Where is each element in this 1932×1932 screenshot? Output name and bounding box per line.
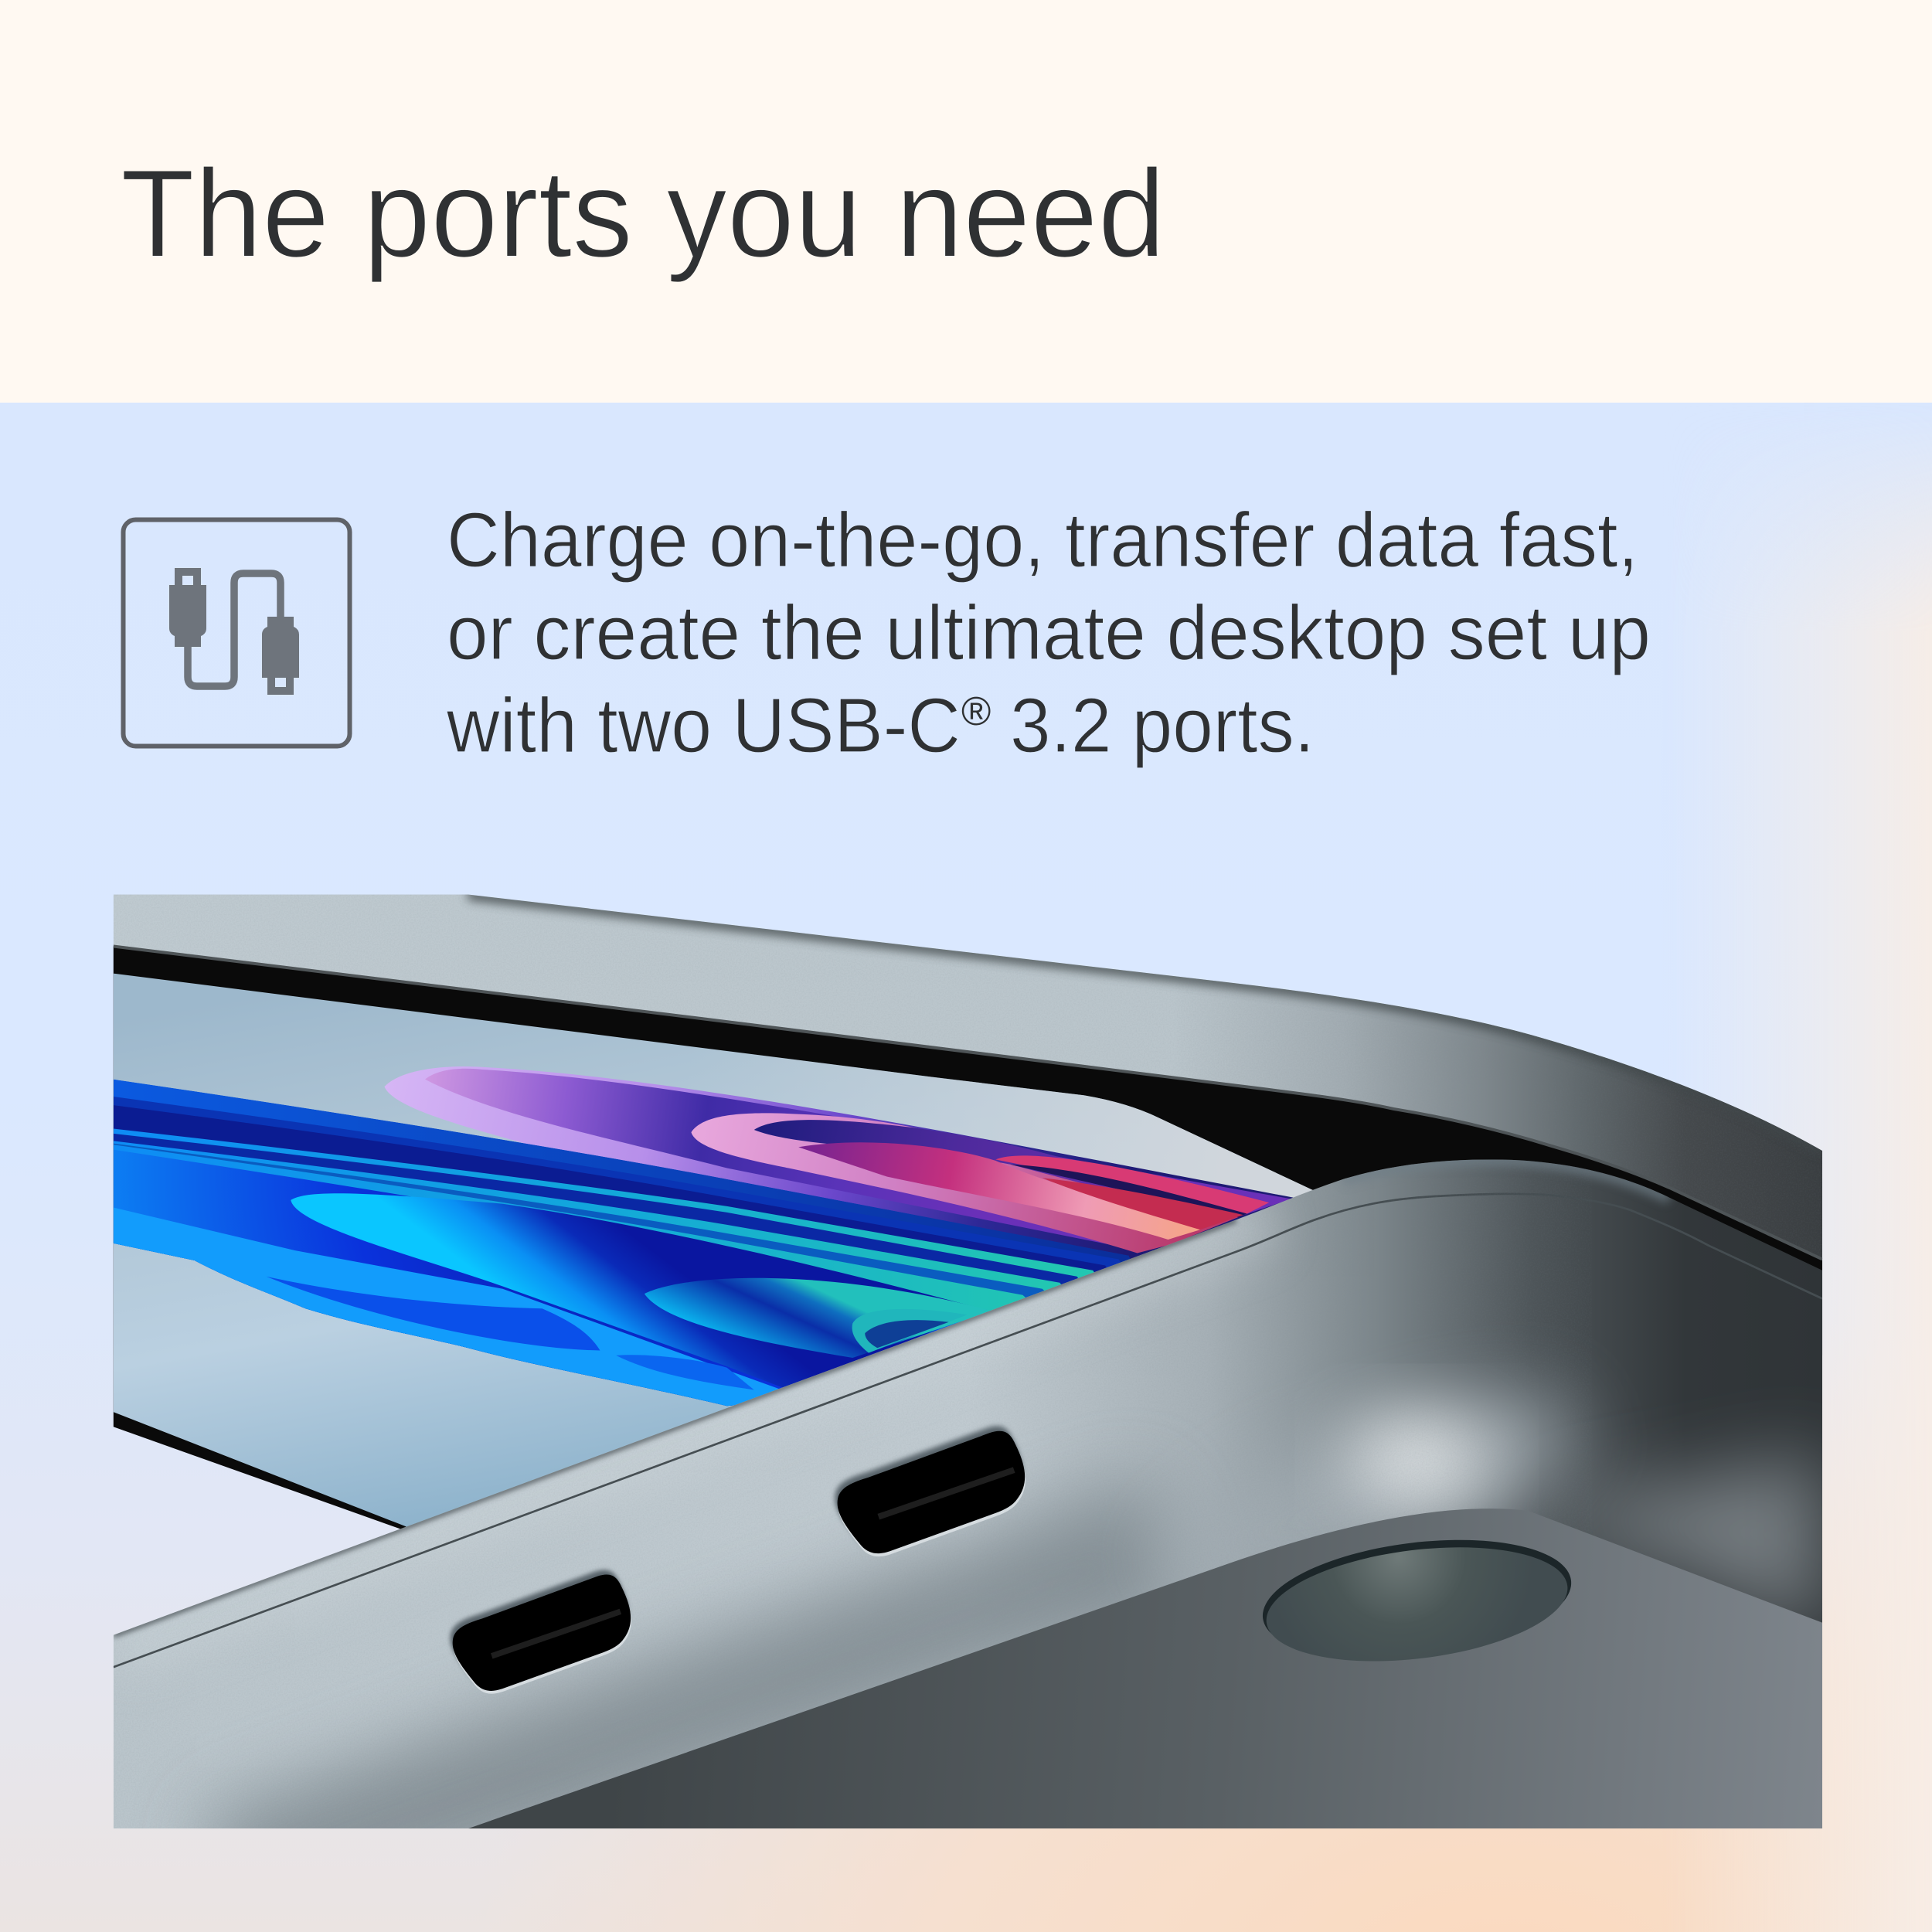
- base edge shadow: [114, 1219, 1236, 1635]
- icon: USB-C cable in rounded box: [124, 519, 349, 747]
- base shading bands: [114, 1159, 1822, 1885]
- description text: or create the ultimate desktop set up: [447, 590, 1651, 676]
- description text: Charge on-the-go, transfer data fast,: [447, 497, 1638, 583]
- USB-C port right: [835, 1426, 1026, 1556]
- seam line on base: [114, 1194, 1822, 1667]
- rubber foot: [1256, 1524, 1578, 1676]
- wallpaper: blue folds: [113, 1079, 1130, 1406]
- title: The ports you need: [121, 144, 1165, 284]
- laptop base: [114, 1158, 1822, 1885]
- laptop lid frame: [113, 895, 1822, 1258]
- black screen bezel: [114, 946, 1822, 1538]
- grain texture: [114, 1158, 1592, 1830]
- screen with wallpaper: [114, 961, 1355, 1540]
- description text: 3.2 ports.: [1010, 682, 1315, 769]
- laptop bottom face: [468, 1509, 1822, 1828]
- description text: ®: [961, 689, 991, 734]
- description text: [446, 497, 1651, 769]
- wallpaper: purple bloom: [384, 1066, 1294, 1269]
- background: blue to peach gradient panel: [0, 403, 1932, 1932]
- background: top cream band: [0, 0, 1932, 403]
- product image: laptop corner: [114, 895, 1822, 1885]
- description text: with two USB-C: [446, 682, 961, 769]
- bezel upper lip: [114, 946, 1822, 1259]
- USB-C port left: [451, 1570, 631, 1694]
